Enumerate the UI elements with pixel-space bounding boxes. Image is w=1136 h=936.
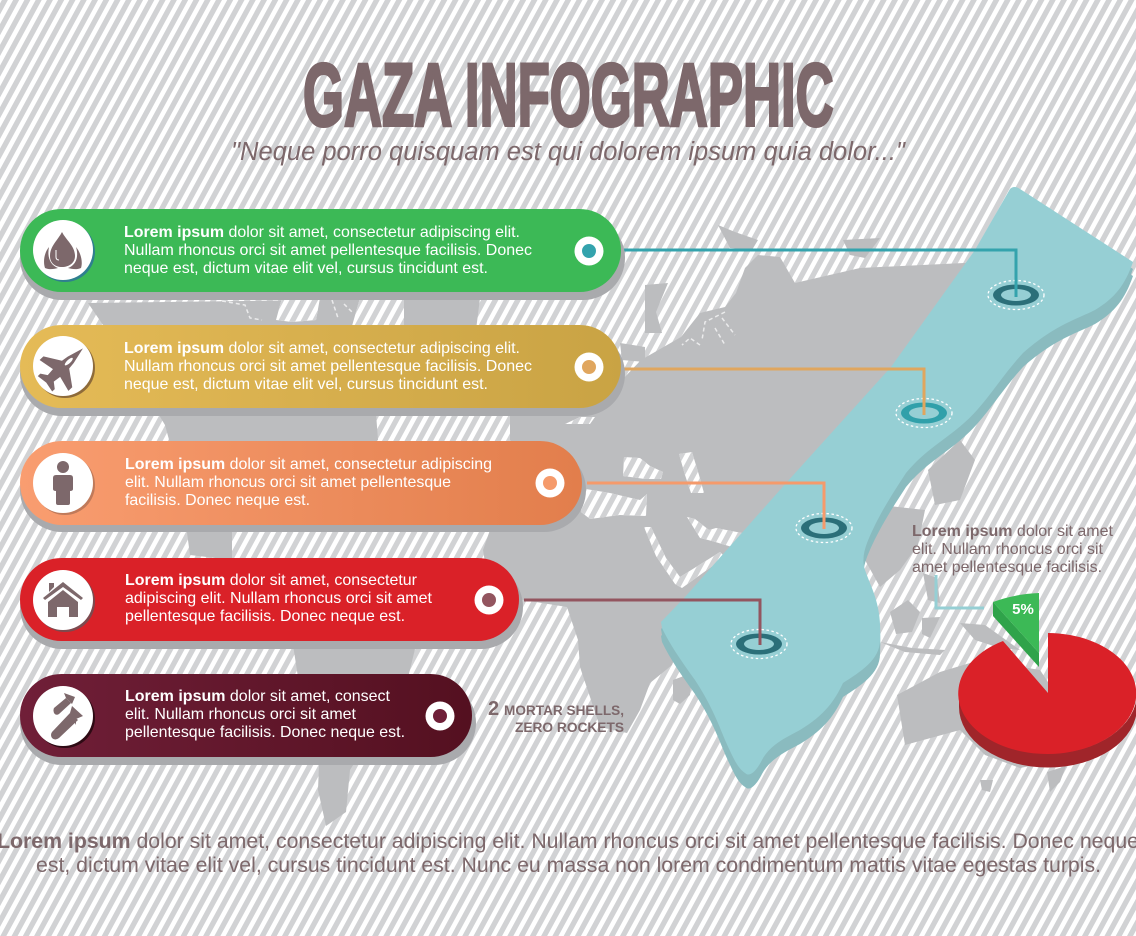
dot marker 5	[426, 702, 454, 730]
text block 4: adipiscing elit. Nullam rhoncus orci sit amet	[125, 590, 433, 607]
text block 2: Nullam rhoncus orci sit amet pellentesque facilisis. Donec	[124, 358, 532, 375]
map pin 4	[731, 630, 787, 658]
map pin 2	[896, 398, 952, 428]
map pin 3	[796, 514, 852, 542]
mortar shells note: MORTAR SHELLS,	[504, 703, 624, 718]
gaza strip map	[661, 187, 1133, 789]
world map background	[88, 225, 1066, 826]
text block 3: facilisis. Donec neque est.	[125, 492, 310, 509]
pie slice 5%: 5%	[1012, 601, 1034, 618]
panel: homes	[20, 558, 523, 649]
text block 2	[124, 340, 532, 393]
mortar shells note	[488, 698, 624, 735]
text block 3	[125, 456, 492, 509]
text block 3: elit. Nullam rhoncus orci sit amet pellentesque	[125, 474, 451, 491]
text block 3: Lorem ipsum dolor sit amet, consectetur adipiscing	[125, 456, 492, 473]
pie slice 5%	[993, 593, 1039, 667]
panel: water	[20, 209, 625, 300]
text block 2: neque est, dictum vitae elit vel, cursus tincidunt est.	[124, 376, 488, 393]
text block 5: Lorem ipsum dolor sit amet, consect	[125, 688, 391, 705]
map pin 1	[988, 280, 1044, 310]
pie chart	[958, 593, 1136, 768]
dot marker 2	[574, 352, 604, 382]
connector lines	[524, 250, 1016, 645]
title: GAZA INFOGRAPHIC	[303, 46, 834, 145]
text block 4	[125, 572, 433, 625]
dot marker 4	[474, 586, 504, 614]
text block 4: pellentesque facilisis. Donec neque est.	[125, 608, 405, 625]
pie callout text	[912, 523, 1114, 576]
text block 4: Lorem ipsum dolor sit amet, consectetur	[125, 572, 417, 589]
footer text: est, dictum vitae elit vel, cursus tincidunt est. Nunc eu massa non lorem condimentum mattis vitae egestas turpis.	[36, 853, 1101, 877]
mortar shells note: 2	[488, 698, 499, 720]
panel: air strikes	[20, 325, 625, 416]
panel: munitions	[20, 674, 476, 765]
pie callout text: Lorem ipsum dolor sit amet	[912, 523, 1114, 540]
icon: water drops	[44, 232, 82, 269]
pie callout text: amet pellentesque facilisis.	[912, 559, 1102, 576]
dot marker 1	[574, 236, 604, 266]
pie callout text: elit. Nullam rhoncus orci sit	[912, 541, 1104, 558]
text block 1: Lorem ipsum dolor sit amet, consectetur adipiscing elit.	[124, 224, 520, 241]
text block 1: neque est, dictum vitae elit vel, cursus tincidunt est.	[124, 260, 488, 277]
subtitle: "Neque porro quisquam est qui dolorem ipsum quia dolor..."	[231, 138, 906, 166]
icon: person	[53, 461, 73, 505]
icon: bombs	[51, 693, 83, 740]
text block 1: Nullam rhoncus orci sit amet pellentesque facilisis. Donec	[124, 242, 532, 259]
footer text: Lorem ipsum dolor sit amet, consectetur adipiscing elit. Nullam rhoncus orci sit amet pellentesque facilisis. Donec neque	[0, 829, 1136, 853]
icon: house	[43, 582, 83, 617]
text block 5: elit. Nullam rhoncus orci sit amet	[125, 706, 357, 723]
text block 2: Lorem ipsum dolor sit amet, consectetur adipiscing elit.	[124, 340, 520, 357]
pie callout line	[936, 575, 984, 608]
footer text	[0, 829, 1136, 877]
icon: fighter jet	[31, 333, 97, 399]
text block 1	[124, 224, 532, 277]
text block 5: pellentesque facilisis. Donec neque est.	[125, 724, 405, 741]
mortar shells note: ZERO ROCKETS	[515, 720, 624, 735]
panel: people	[20, 441, 586, 532]
text block 5	[125, 688, 405, 741]
dot marker 3	[536, 468, 564, 498]
